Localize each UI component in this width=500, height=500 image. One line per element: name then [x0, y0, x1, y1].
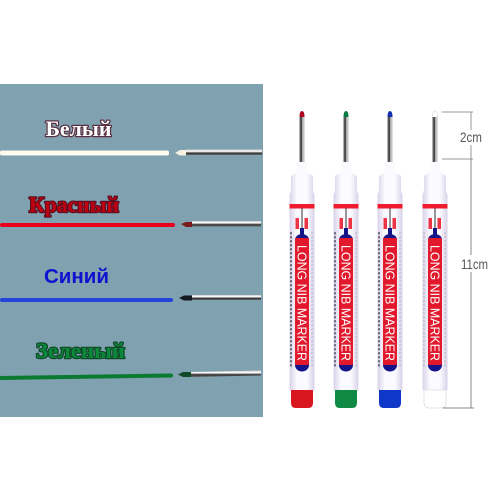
printed small text: [335, 208, 356, 367]
sample: green: [0, 338, 261, 378]
white stroke line: [0, 150, 169, 156]
body: [334, 162, 358, 391]
label: LONG NIB MARKER: [294, 245, 308, 361]
printed small text: [424, 208, 445, 367]
sample: red: [0, 192, 261, 227]
printed small text: [379, 208, 400, 367]
needle: [344, 117, 348, 163]
cap: [379, 390, 401, 408]
heading: green: Зеленый: [36, 338, 125, 363]
cap: [291, 390, 313, 408]
dimension: 11cm: [443, 159, 488, 408]
needle: [432, 117, 438, 163]
cap: [335, 390, 357, 408]
dimension: 2cm: 2cm: [460, 129, 482, 145]
green nib: [178, 370, 261, 377]
nib: [300, 111, 304, 118]
cap: [424, 390, 446, 408]
nib: [432, 111, 438, 118]
blue nib: [179, 295, 261, 300]
marker: white: [422, 111, 448, 408]
white nib: [175, 150, 262, 156]
marker: blue: [378, 111, 402, 408]
label: LONG NIB MARKER: [382, 245, 396, 361]
blue stroke line: [0, 298, 173, 302]
heading: red: Красный: [29, 192, 119, 217]
green stroke line: [0, 376, 171, 378]
red band: [422, 204, 448, 208]
panel: colour samples: [0, 84, 263, 417]
body: [422, 162, 448, 391]
label: LONG NIB MARKER: [428, 245, 442, 361]
needle: [300, 117, 304, 163]
red stroke line: [0, 223, 175, 227]
red band: [334, 204, 358, 208]
body: [290, 162, 314, 391]
marker: red: [290, 111, 314, 408]
heading: blue: Синий: [44, 265, 109, 288]
nib: [388, 111, 392, 118]
marker: green: [334, 111, 358, 408]
dimension: 2cm: [442, 112, 482, 159]
red band: [378, 204, 402, 208]
red band: [290, 204, 314, 208]
printed small text: [291, 208, 312, 367]
sample: white: [0, 116, 262, 156]
heading: white: Белый: [46, 116, 112, 141]
label: LONG NIB MARKER: [338, 245, 352, 361]
red nib: [181, 221, 261, 227]
sample: blue: [0, 265, 261, 302]
dimension: 11cm: 11cm: [461, 256, 488, 272]
body: [378, 162, 402, 391]
nib: [344, 111, 348, 118]
needle: [388, 117, 392, 163]
